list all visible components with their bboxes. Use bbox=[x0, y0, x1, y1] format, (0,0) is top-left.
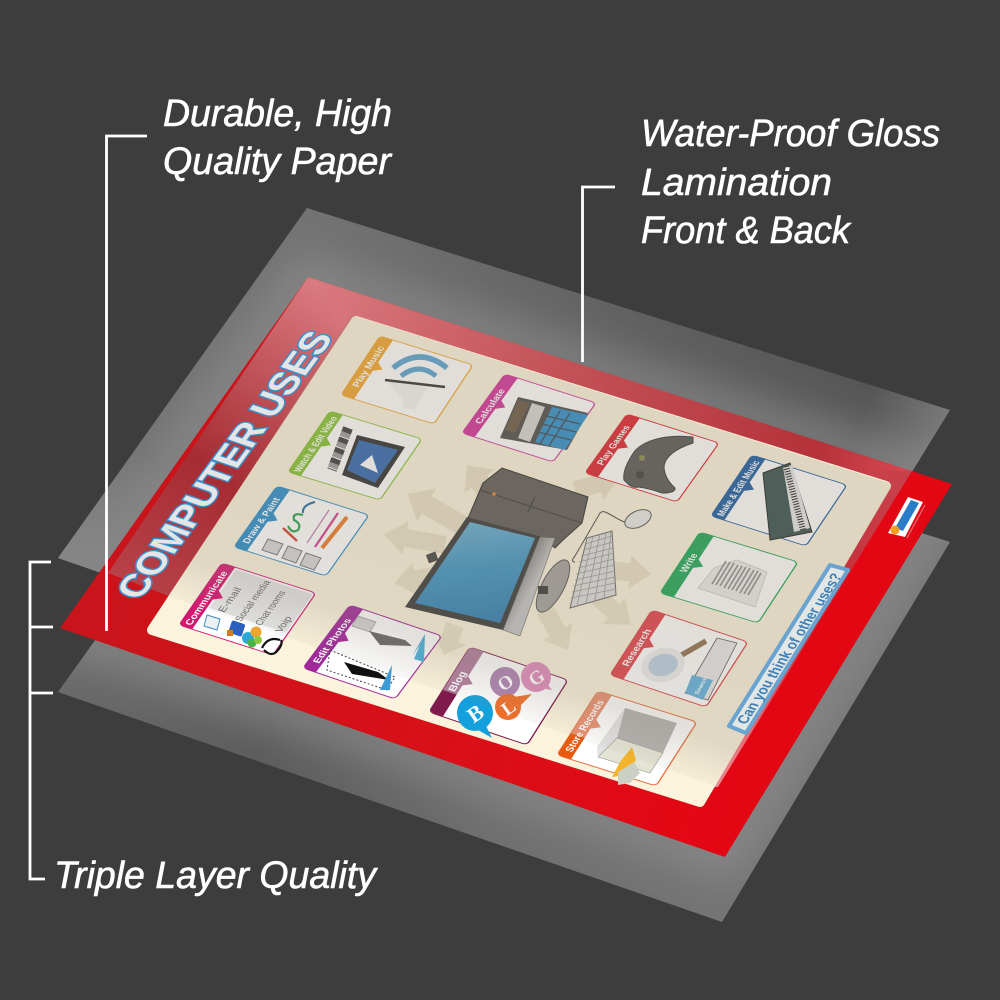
cd disc bbox=[530, 555, 576, 617]
callout: Can you think of other uses?: Can you think of other uses? bbox=[734, 571, 846, 726]
card: Watch & Edit Video bbox=[288, 411, 422, 500]
poster red paper bbox=[60, 277, 952, 857]
label: Water-Proof Gloss Lamination Front & Back: Water-Proof Gloss bbox=[641, 113, 940, 155]
card: Play Music bbox=[341, 336, 473, 424]
laminate tinted top band bbox=[308, 277, 912, 520]
card: Play Games: Play Games bbox=[594, 424, 633, 466]
card: Write bbox=[660, 532, 798, 623]
icon: blog letter bubbles: L bbox=[498, 696, 520, 720]
card: Communicate bbox=[179, 563, 316, 655]
bottom laminate sheet bbox=[58, 533, 950, 922]
card: Communicate: Chat rooms bbox=[253, 590, 289, 627]
card: Make & Edit Music bbox=[711, 455, 847, 546]
mouse and cable bbox=[572, 512, 629, 562]
label: Water-Proof Gloss Lamination Front & Back: Lamination bbox=[641, 162, 832, 204]
label: Durable, High Quality Paper bbox=[163, 93, 392, 183]
panel: poster bbox=[60, 277, 952, 857]
laminate tinted right band bbox=[690, 470, 912, 787]
icon: blog letter bubbles: G bbox=[525, 665, 549, 691]
label: Water-Proof Gloss Lamination Front & Back: Front & Back bbox=[641, 210, 852, 252]
laminate tinted left band bbox=[108, 277, 380, 604]
card: Research: Search bbox=[694, 676, 710, 696]
poster title: COMPUTER USES bbox=[108, 326, 343, 604]
card: Draw & Paint bbox=[234, 486, 369, 576]
card: Play Games bbox=[585, 414, 719, 502]
label: Durable, High Quality Paper: Durable, High bbox=[163, 93, 392, 135]
card: Make & Edit Music: Make & Edit Music bbox=[714, 459, 762, 518]
icon: blog letter bubbles: B bbox=[462, 699, 489, 728]
card: Research bbox=[610, 610, 748, 707]
card: Write: Write bbox=[677, 552, 700, 574]
label: Triple Layer Quality: Triple Layer Quality bbox=[54, 855, 378, 897]
card: Store Records: Store Records bbox=[563, 699, 607, 753]
card: Blog bbox=[429, 647, 568, 745]
bracket: three layers bbox=[30, 562, 53, 879]
card: Communicate: Social media bbox=[233, 579, 274, 623]
laminate shading over board bbox=[171, 315, 893, 782]
cream board bbox=[152, 321, 886, 802]
icon: blog letter bubbles bbox=[457, 662, 552, 738]
card: Draw & Paint: Draw & Paint bbox=[240, 496, 282, 545]
publisher logo bbox=[888, 497, 925, 538]
card: Communicate: Voip bbox=[273, 615, 295, 634]
card: Store Records bbox=[557, 691, 697, 786]
card: Calculate: Calculate bbox=[472, 387, 508, 425]
label: Durable, High Quality Paper: Quality Paper bbox=[163, 141, 392, 183]
label: Water-Proof Gloss Lamination Front & Back bbox=[641, 113, 940, 252]
leader line: lamination bbox=[582, 187, 615, 362]
card: Calculate bbox=[462, 374, 596, 462]
central computer illustration bbox=[405, 468, 654, 636]
computer tower bbox=[468, 468, 588, 548]
icon: blog letter bubbles: O bbox=[494, 670, 518, 696]
top laminate sheet bbox=[58, 208, 950, 572]
card: Communicate: E-mail bbox=[216, 586, 245, 614]
card: Watch & Edit Video: Watch & Edit Video bbox=[291, 415, 340, 473]
card: Blog: Blog bbox=[446, 670, 469, 693]
card: Edit Photos: Edit Photos bbox=[310, 617, 354, 665]
card: Communicate: Communicate bbox=[182, 570, 230, 627]
card: Edit Photos bbox=[303, 605, 442, 699]
monitor bbox=[405, 517, 540, 630]
keyboard bbox=[570, 531, 616, 608]
card: Research: Research bbox=[620, 628, 654, 668]
leader line: paper bbox=[106, 136, 147, 631]
background arrows bbox=[381, 454, 652, 661]
card: Play Music: Play Music bbox=[350, 344, 387, 388]
